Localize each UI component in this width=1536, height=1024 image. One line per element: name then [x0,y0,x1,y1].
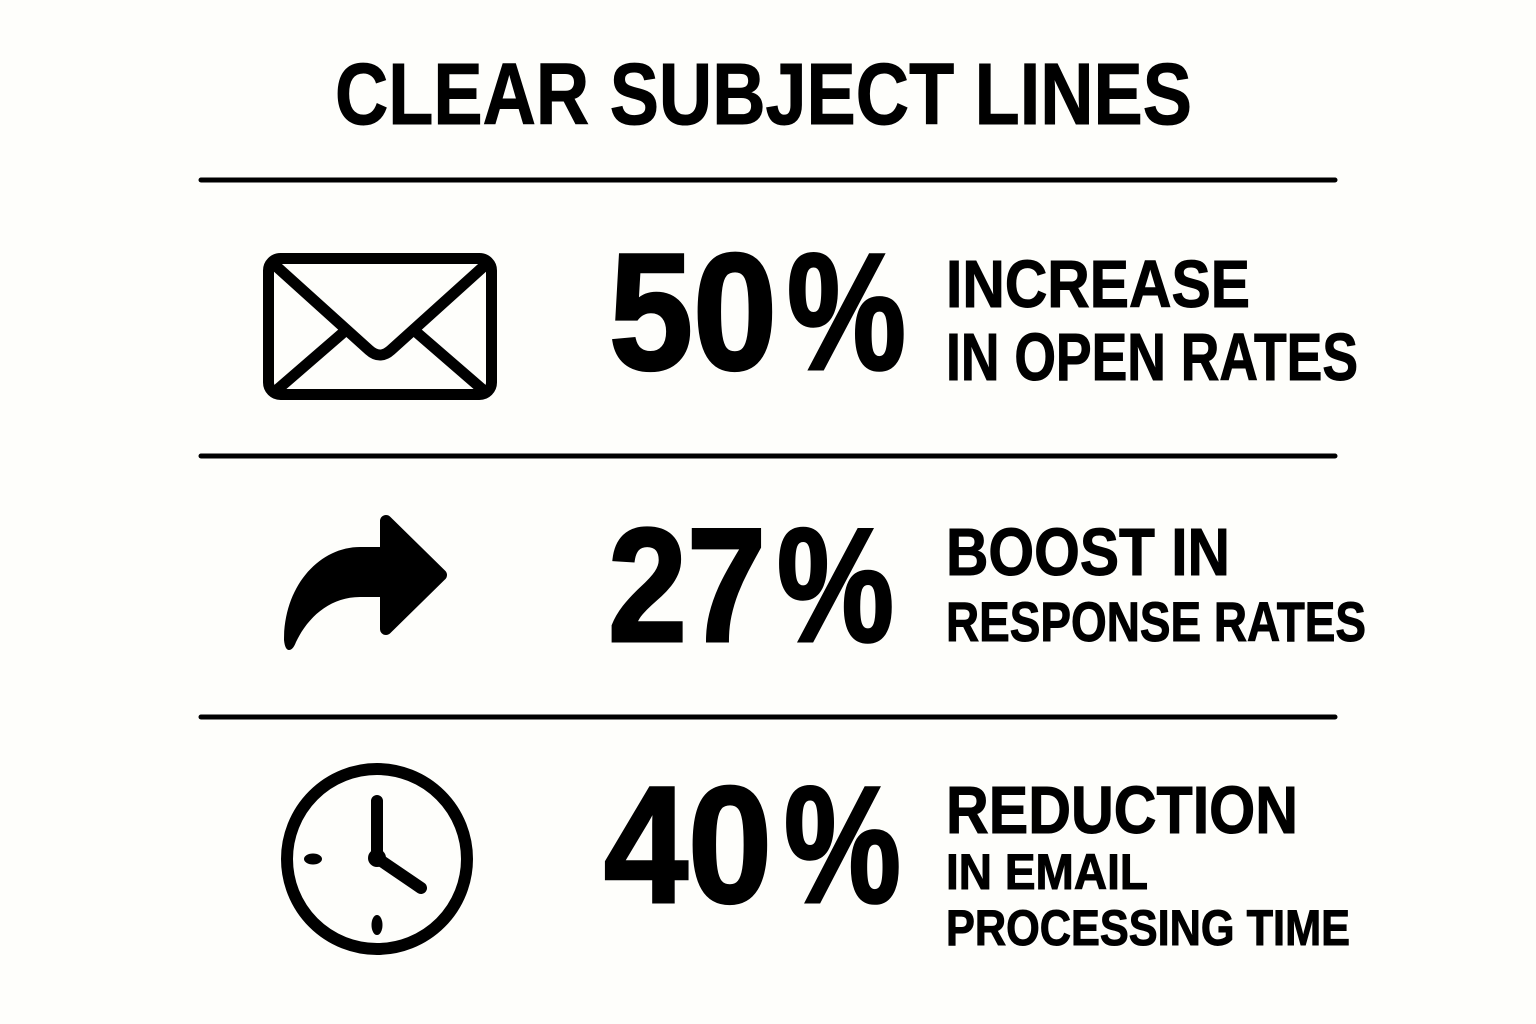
label: reduction in email processing time [946,773,1350,956]
stat: 50% [609,220,906,405]
icon: envelope [268,258,492,394]
label: reduction in email processing time: PROCESSING TIME [946,900,1350,956]
label: increase in open rates: INCREASE [946,247,1250,322]
stat: 27%: % [777,495,894,676]
label: increase in open rates [946,247,1358,395]
stat: 40%: % [784,753,901,938]
icon: clock [287,769,467,949]
title: CLEAR SUBJECT LINES [335,46,1192,143]
label: reduction in email processing time: IN EMAIL [946,844,1148,900]
stat: 40%: 40 [604,753,772,938]
stat: 50%: 50 [609,220,777,405]
stat: 27%: 27 [608,495,766,676]
label: boost in response rates: BOOST IN [946,515,1230,590]
label: boost in response rates [946,515,1366,653]
label: increase in open rates: IN OPEN RATES [946,320,1358,395]
icon: reply arrow [284,521,441,650]
row: response rates [284,495,1366,676]
label: boost in response rates: RESPONSE RATES [946,590,1366,653]
row: open rates [268,220,1358,405]
stat: 50%: % [787,220,906,405]
stat: 40% [604,753,901,938]
row: email processing time [287,753,1350,956]
label: reduction in email processing time: REDUCTION [946,773,1298,848]
stat: 27% [608,495,894,676]
